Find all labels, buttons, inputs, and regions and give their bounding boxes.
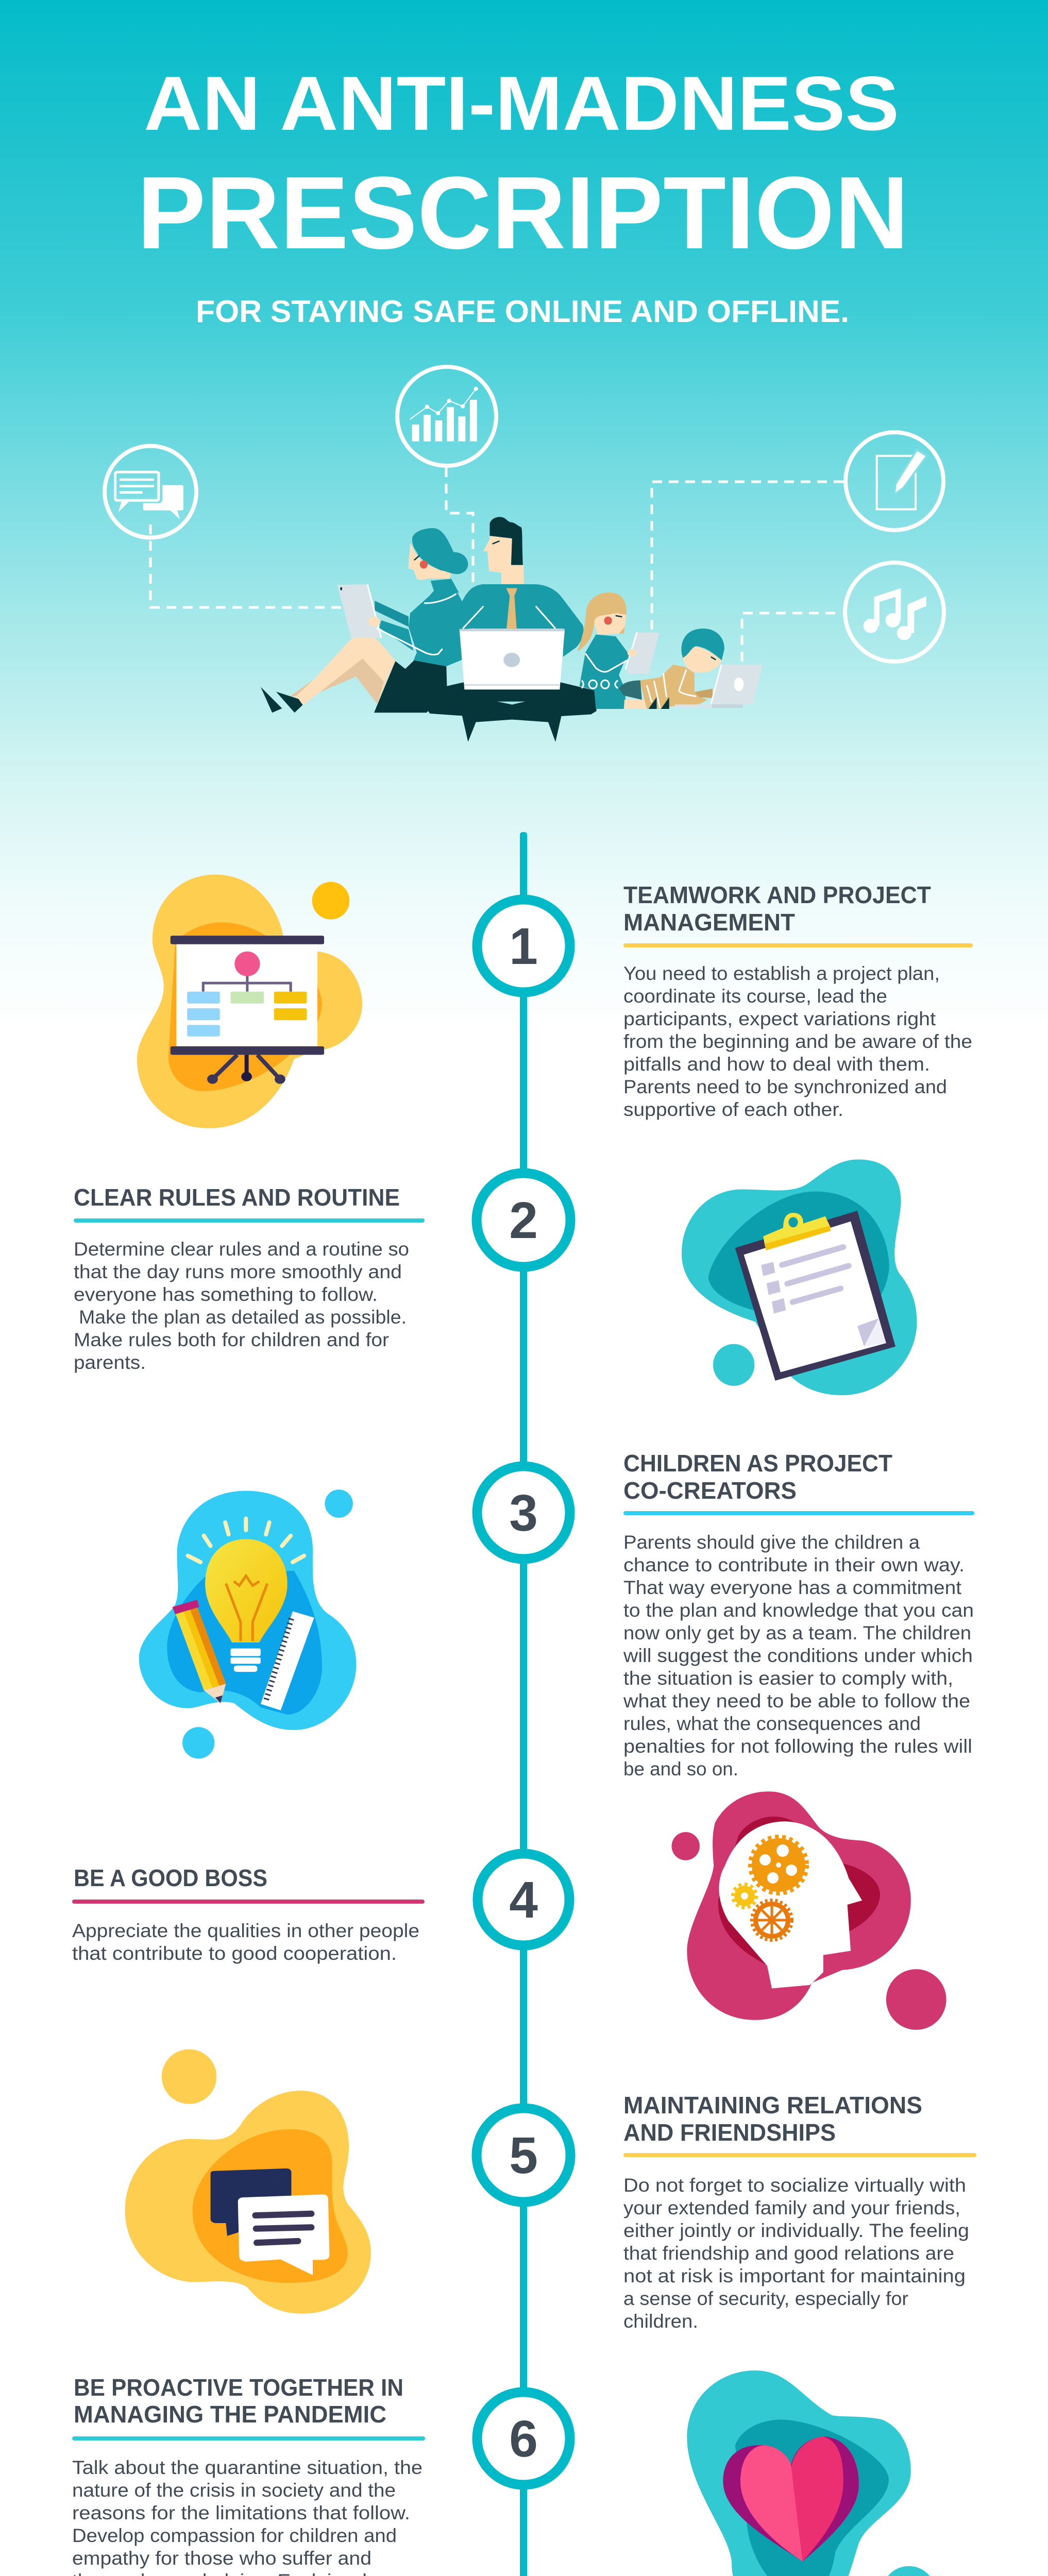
text: clear rules: CLEAR RULES AND ROUTINE bbox=[74, 1184, 400, 1211]
text: children: Parents should give the children a bbox=[623, 1532, 920, 1553]
illustration: family with devices bbox=[261, 517, 763, 742]
boy with laptop bbox=[619, 629, 763, 709]
icon: chat bubbles in circle bbox=[105, 446, 196, 538]
text: teamwork: supportive of each other. bbox=[623, 1099, 843, 1120]
number badge 4 bbox=[478, 1854, 569, 1945]
text: relations: not at risk is important for maintaining bbox=[623, 2265, 966, 2286]
number badge 1: 1 bbox=[509, 918, 538, 975]
text: children: rules, what the consequences and bbox=[623, 1713, 921, 1734]
text: clear rules: Determine clear rules and a routine so bbox=[74, 1239, 409, 1260]
step 1: teamwork bbox=[137, 875, 973, 1128]
text: relations bbox=[623, 2092, 976, 2332]
text: relations: a sense of security, especially for bbox=[623, 2288, 908, 2309]
text: relations: children. bbox=[623, 2311, 698, 2332]
girl with tablet bbox=[578, 592, 660, 709]
text: clear rules: that the day runs more smoothly and bbox=[74, 1261, 402, 1282]
background gradient bbox=[0, 0, 1048, 1030]
number badge 4: 4 bbox=[509, 1871, 538, 1929]
title block bbox=[137, 60, 909, 329]
woman bbox=[261, 528, 471, 713]
text: clear rules: parents. bbox=[74, 1352, 146, 1373]
text: children: now only get by as a team. The children bbox=[623, 1622, 971, 1643]
text: teamwork: coordinate its course, lead the bbox=[623, 986, 887, 1007]
title line two: PRESCRIPTION bbox=[137, 156, 909, 270]
number badge 1 bbox=[477, 900, 570, 992]
icon: clipboard bbox=[682, 1160, 917, 1395]
text: relations: MAINTAINING RELATIONS bbox=[623, 2092, 922, 2119]
text: relations: either jointly or individually. The feeling bbox=[623, 2220, 969, 2241]
text: proactive: MANAGING THE PANDEMIC bbox=[74, 2401, 386, 2428]
text: proactive: nature of the crisis in society and the bbox=[72, 2480, 396, 2501]
man with laptop bbox=[427, 517, 597, 742]
text: teamwork: MANAGEMENT bbox=[623, 909, 795, 936]
number badge 3: 3 bbox=[509, 1484, 538, 1542]
dashed connectors bbox=[150, 467, 843, 662]
icon: head with gears bbox=[671, 1791, 946, 2030]
text: children: CHILDREN AS PROJECT bbox=[623, 1450, 892, 1477]
text: children: be and so on. bbox=[623, 1758, 738, 1780]
text: proactive: empathy for those who suffer and bbox=[72, 2548, 371, 2569]
icon: presentation board bbox=[137, 875, 362, 1128]
text: children bbox=[623, 1450, 974, 1780]
text: proactive: Talk about the quarantine situation, the bbox=[72, 2457, 422, 2478]
step 5: relations bbox=[125, 2049, 976, 2332]
text: children: That way everyone has a commitment bbox=[623, 1577, 962, 1598]
text: relations: that friendship and good relations are bbox=[623, 2243, 954, 2264]
timeline line bbox=[520, 832, 527, 2576]
text: clear rules: Make the plan as detailed as possible. bbox=[79, 1307, 407, 1328]
icon: pencil and paper in circle bbox=[846, 432, 943, 530]
icon: chat bubbles bbox=[125, 2049, 371, 2314]
number badge 3 bbox=[477, 1466, 570, 1559]
text: children: to the plan and knowledge that you can bbox=[623, 1600, 974, 1621]
text: teamwork: pitfalls and how to deal with them. bbox=[623, 1054, 930, 1075]
icon: music notes in circle bbox=[845, 563, 944, 662]
text: proactive: BE PROACTIVE TOGETHER IN bbox=[74, 2374, 403, 2401]
text: children: chance to contribute in their own way. bbox=[623, 1554, 965, 1575]
step 2: clear rules bbox=[74, 1160, 917, 1395]
text: clear rules: everyone has something to follow. bbox=[74, 1284, 378, 1305]
text: good boss: BE A GOOD BOSS bbox=[74, 1865, 267, 1891]
text: teamwork: You need to establish a project plan, bbox=[623, 963, 940, 984]
text: proactive: Develop compassion for children and bbox=[72, 2525, 397, 2546]
text: good boss: Appreciate the qualities in other people bbox=[72, 1920, 419, 1941]
text: children: what they need to be able to follow the bbox=[623, 1690, 970, 1711]
step 6: proactive bbox=[72, 2370, 936, 2576]
text: relations: Do not forget to socialize virtually with bbox=[623, 2175, 966, 2196]
text: good boss bbox=[72, 1865, 425, 1964]
text: teamwork: TEAMWORK AND PROJECT bbox=[623, 882, 931, 908]
number badge 6: 6 bbox=[509, 2410, 538, 2468]
step 4: good boss bbox=[72, 1791, 946, 2030]
text: teamwork: from the beginning and be aware of the bbox=[623, 1031, 972, 1052]
icon: bar chart in circle bbox=[397, 367, 496, 466]
text: proactive bbox=[72, 2374, 425, 2576]
number badge 6 bbox=[477, 2392, 570, 2485]
icon: heart bbox=[687, 2370, 936, 2576]
text: clear rules bbox=[74, 1184, 425, 1373]
subtitle: FOR STAYING SAFE ONLINE AND OFFLINE. bbox=[196, 294, 849, 329]
number badge 5 bbox=[477, 2108, 570, 2202]
text: clear rules: Make rules both for children and for bbox=[74, 1329, 389, 1350]
text: children: the situation is easier to comply with, bbox=[623, 1668, 953, 1689]
text: children: penalties for not following the rules will bbox=[623, 1736, 972, 1757]
text: teamwork bbox=[623, 882, 973, 1120]
title line one: AN ANTI-MADNESS bbox=[144, 60, 899, 146]
number badge 5: 5 bbox=[509, 2127, 538, 2184]
text: children: will suggest the conditions under which bbox=[623, 1645, 973, 1666]
number badge 2 bbox=[477, 1173, 570, 1267]
number badge 2: 2 bbox=[509, 1192, 538, 1249]
step 3: children bbox=[139, 1450, 974, 1780]
text: relations: your extended family and your friends, bbox=[623, 2197, 960, 2218]
text: teamwork: participants, expect variations right bbox=[623, 1008, 936, 1029]
text: children: CO-CREATORS bbox=[623, 1477, 797, 1504]
icon: light bulb, pencil and ruler bbox=[139, 1489, 356, 1758]
text: relations: AND FRIENDSHIPS bbox=[623, 2119, 836, 2146]
text: teamwork: Parents need to be synchronized and bbox=[623, 1076, 947, 1097]
text: good boss: that contribute to good cooperation. bbox=[72, 1943, 397, 1964]
text: proactive: reasons for the limitations that follow. bbox=[72, 2502, 410, 2523]
